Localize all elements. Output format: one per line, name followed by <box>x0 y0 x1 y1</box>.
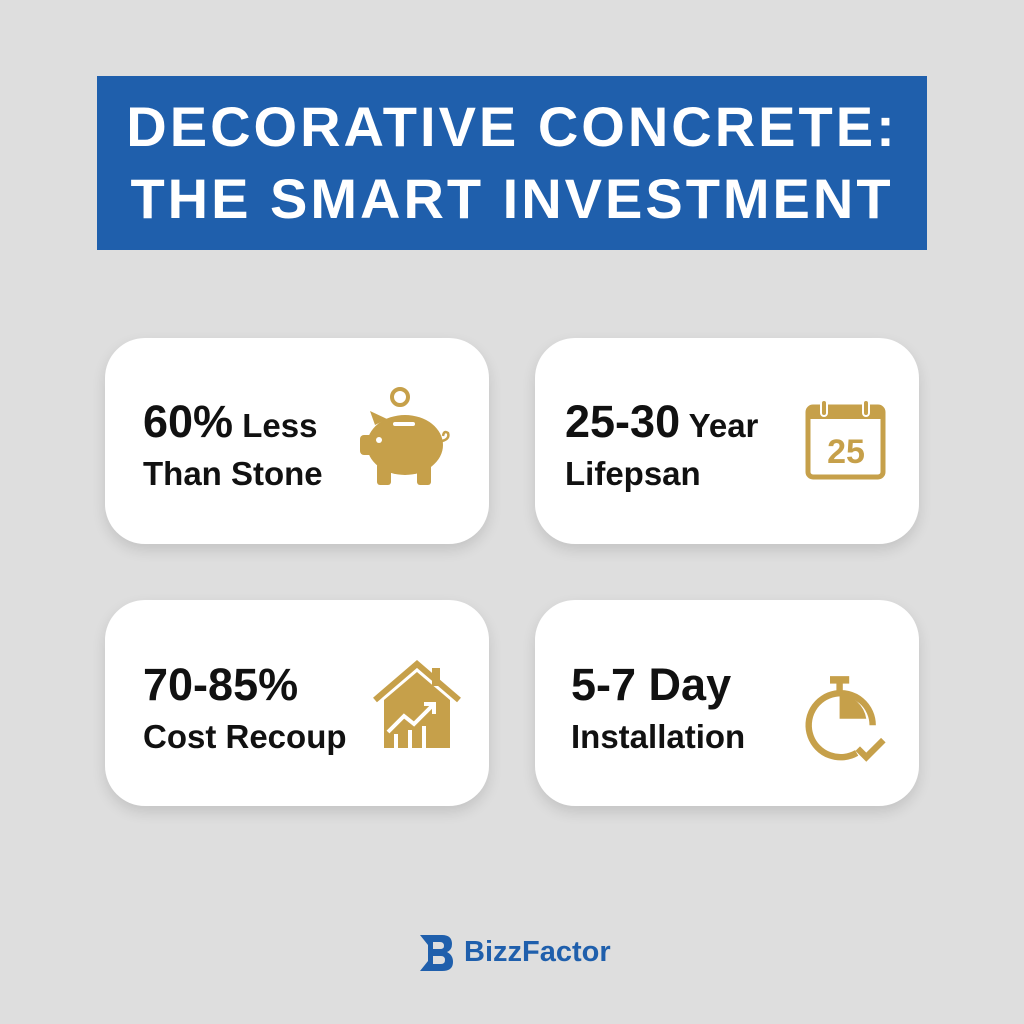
card: 60% less than stone <box>105 338 489 544</box>
text: 25-30 Year <box>565 396 758 447</box>
logo: BizzFactor <box>420 935 611 971</box>
icon: house with chart <box>373 660 461 748</box>
text <box>571 659 745 755</box>
text: 60% Less <box>143 396 317 447</box>
title: DECORATIVE CONCRETE: <box>126 95 898 158</box>
title <box>97 76 927 250</box>
text: 5-7 Day <box>571 659 731 710</box>
icon: calendar: 25 <box>827 433 865 471</box>
card: 70-85% cost recoup <box>105 600 489 806</box>
title: THE SMART INVESTMENT <box>130 167 894 230</box>
card: 5-7 day installation <box>535 600 919 806</box>
icon: calendar <box>806 401 886 480</box>
icon: piggy bank <box>360 387 450 485</box>
text: brand: BizzFactor <box>464 936 611 968</box>
icon: logo mark <box>420 935 453 971</box>
text <box>565 396 758 492</box>
text: Lifepsan <box>565 455 701 492</box>
text: Than Stone <box>143 455 323 492</box>
card: 25-30 year lifespan <box>535 338 919 544</box>
icon: stopwatch <box>806 676 886 762</box>
text: 70-85% <box>143 659 298 710</box>
text: Installation <box>571 718 745 755</box>
text: Cost Recoup <box>143 718 347 755</box>
text <box>143 396 323 492</box>
text <box>143 659 347 755</box>
